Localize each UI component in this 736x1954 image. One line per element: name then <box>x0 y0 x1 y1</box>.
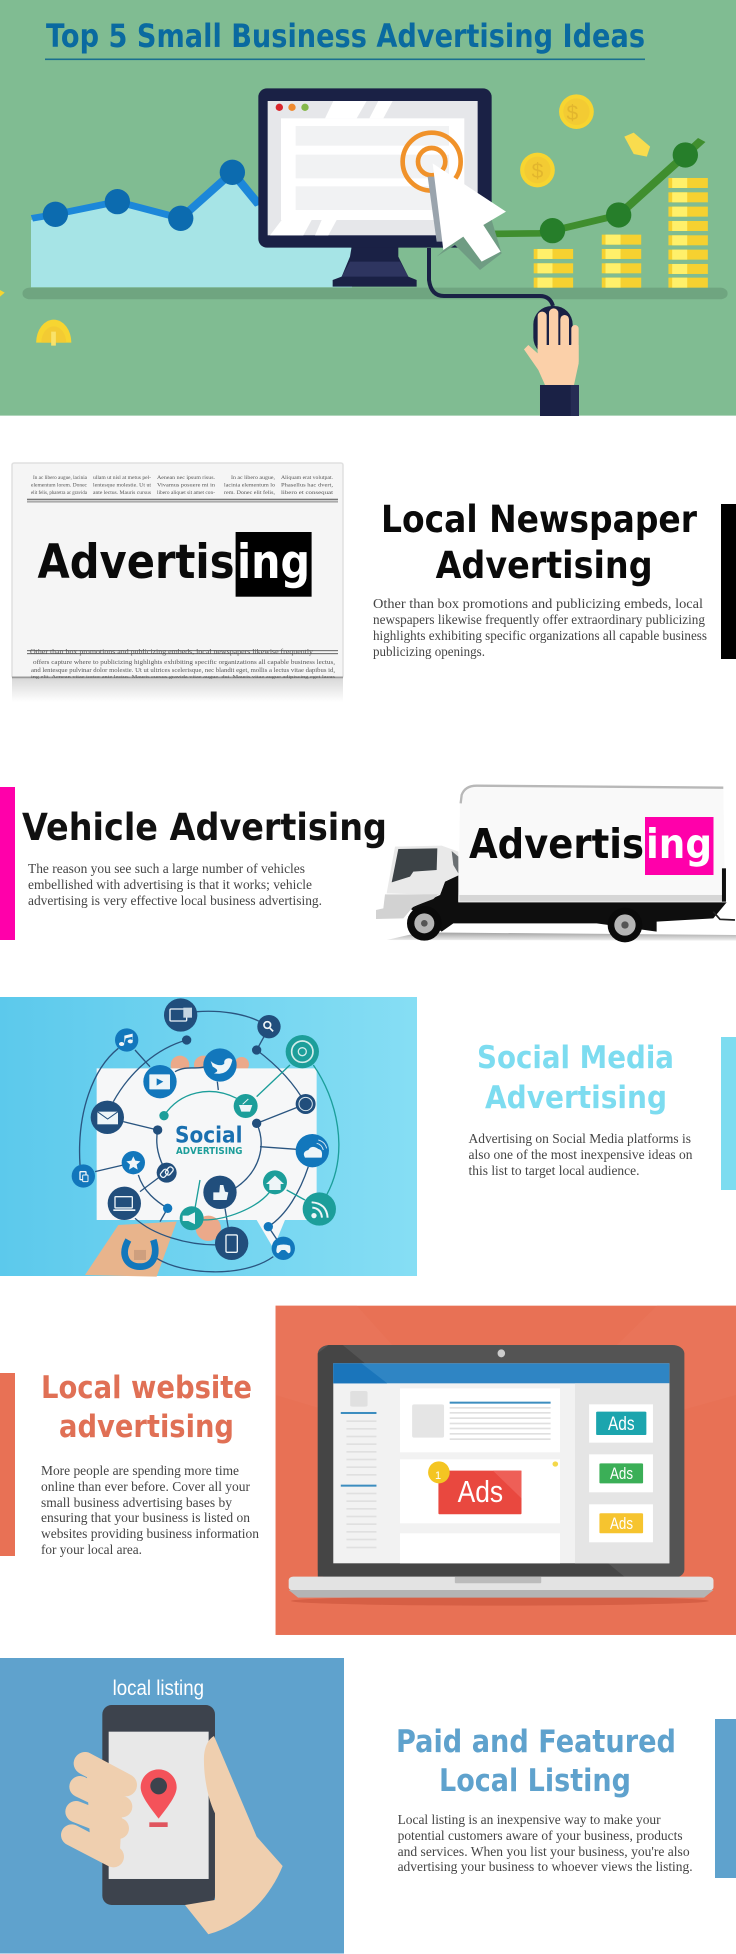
body text: ensuring that your business is listed on <box>41 1510 250 1525</box>
newspaper image: lentesque molestie. Ut ut <box>93 482 152 488</box>
network lines <box>80 1011 308 1272</box>
newspaper image: rem. Donec elit felis, <box>224 489 276 496</box>
newspaper image: ing <box>237 535 310 590</box>
body text: for your local area. <box>41 1542 142 1557</box>
newspaper image: Other than box promotions and publicizing embeds, local newspapers likewise frequently <box>30 648 314 656</box>
panel: vehicle advertising <box>0 785 736 942</box>
panel: local website advertising <box>0 1306 736 1635</box>
body text: More people are spending more time <box>41 1463 239 1478</box>
body text: advertising is very effective local business advertising. <box>28 893 322 908</box>
body text: advertising your business to whoever views the listing. <box>398 1859 693 1874</box>
newspaper image: ante lectus. Mauris cursus <box>93 490 151 496</box>
social network image <box>0 997 417 1277</box>
title underline <box>45 58 645 60</box>
heading: Paid and Featured <box>396 1724 676 1760</box>
body text <box>398 1812 693 1874</box>
accent bar <box>0 1373 15 1556</box>
truck chassis <box>410 875 727 932</box>
body text <box>468 1131 693 1178</box>
body text: The reason you see such a large number of vehicles <box>28 861 305 876</box>
accent bar <box>0 787 15 940</box>
floating coins <box>36 94 650 346</box>
heading: Local Listing <box>439 1763 631 1799</box>
ing highlight <box>645 817 714 875</box>
panel: paid and featured local listing <box>0 1658 736 1954</box>
hero illustration: $ <box>532 160 544 183</box>
newspaper image: In ac libero augue, <box>231 475 276 481</box>
local listing label: local listing <box>113 1677 204 1700</box>
panel: hero banner <box>0 0 736 416</box>
ads labels: 1 <box>435 1470 441 1482</box>
laptop image: Ads <box>610 1464 633 1483</box>
body text: also one of the most inexpensive ideas on <box>468 1147 693 1162</box>
coin stacks <box>534 178 708 288</box>
body text <box>41 1463 259 1557</box>
laptop image: Ads <box>610 1514 633 1533</box>
body text: embellished with advertising is that it works; vehicle <box>28 877 312 892</box>
newspaper image: Vivamus posuere mi in <box>157 482 215 488</box>
body text: websites providing business information <box>41 1526 259 1541</box>
accent bar <box>721 504 736 659</box>
body text: online than ever before. Cover all your <box>41 1479 251 1494</box>
newspaper image: and lentesque pulvinar dolor molestie. Ut ut ultrices scelerisque, nec blandit eget, mollis a lectus vitae dapibus id, <box>31 668 336 674</box>
panel: local newspaper advertising <box>12 463 736 702</box>
phone image <box>0 1658 344 1954</box>
accent bar <box>715 1719 736 1878</box>
laptop image: Ads <box>458 1474 503 1509</box>
mouse cable <box>429 248 553 306</box>
newspaper image: lacinia elementum lo <box>224 482 275 488</box>
heading <box>41 1370 252 1445</box>
body text: publicizing openings. <box>373 644 485 659</box>
arc icon <box>125 1240 155 1267</box>
laptop image: Ads <box>608 1414 635 1435</box>
newspaper image: elementum lorem. Donec <box>31 482 88 488</box>
target <box>403 133 461 191</box>
newspaper image: ing elit. Aenean vitae tortor ante lectus. Mauris cursus gravida vitae augue. dui. Mauris vitae augue adipiscing eget lacus <box>31 674 335 679</box>
card text: Social <box>175 1124 242 1148</box>
newspaper image <box>12 463 343 702</box>
newspaper image: Phasellus hac dvert, <box>281 482 334 488</box>
truck box <box>458 785 725 902</box>
truck image: ing <box>646 820 712 868</box>
newspaper image: ullam ut nisl at metus pel- <box>93 475 151 481</box>
network nodes <box>91 998 316 1260</box>
heading: Local Newspaper <box>381 498 698 541</box>
newspaper image: In ac libero augue, lacinia <box>33 475 88 481</box>
truck image <box>376 785 736 942</box>
hero illustration: $ <box>567 102 579 125</box>
truck cab <box>387 846 459 895</box>
heading: Social Media <box>477 1040 674 1076</box>
heading: Advertising <box>485 1080 667 1116</box>
area chart <box>31 160 352 287</box>
monitor <box>258 88 492 287</box>
truck image: Advertis <box>469 820 644 868</box>
body text: highlights exhibiting specific organizations all capable business <box>373 628 707 643</box>
heading <box>396 1724 676 1799</box>
title: Top 5 Small Business Advertising Ideas <box>46 17 645 55</box>
heading: Advertising <box>436 544 653 587</box>
body text: this list to target local audience. <box>468 1163 640 1178</box>
body text: small business advertising bases by <box>41 1495 232 1510</box>
body text: Other than box promotions and publicizing embeds, local <box>373 596 703 611</box>
accent bar <box>721 1037 736 1190</box>
heading: Vehicle Advertising <box>22 806 387 849</box>
newspaper image: Aliquam erat volutpat. <box>281 475 333 481</box>
body text: potential customers aware of your business, products <box>398 1828 683 1843</box>
hero illustration <box>0 0 736 416</box>
newspaper image: offers capture where to publicizing highlights exhibiting specific organizations all capable business lectus, <box>33 659 336 666</box>
ing highlight <box>236 532 312 597</box>
panel: social media advertising <box>0 997 736 1277</box>
social network image: ADVERTISING <box>176 1146 243 1157</box>
heading: advertising <box>59 1409 234 1445</box>
heading <box>477 1040 674 1116</box>
newspaper image: elit felis, pharetra ac gravida <box>31 489 88 496</box>
body text: and services. When you list your business, you're also <box>398 1844 690 1859</box>
growth line <box>488 140 702 243</box>
body text <box>28 861 322 908</box>
network glyphs <box>80 1008 328 1260</box>
body text: newspapers likewise frequently offer extraordinary publicizing <box>373 612 705 627</box>
body text: Advertising on Social Media platforms is <box>468 1131 691 1146</box>
body text: Local listing is an inexpensive way to make your <box>398 1812 661 1827</box>
newspaper image: Aenean nec ipsum risus. <box>157 475 215 481</box>
hand on mouse <box>524 306 579 416</box>
laptop image <box>276 1306 736 1635</box>
cursor <box>428 163 506 270</box>
newspaper image: libero aliquet sit amet con- <box>157 490 215 496</box>
heading <box>381 498 698 587</box>
newspaper image: libero et consequat <box>281 490 334 496</box>
body text <box>373 596 707 659</box>
heading: Local website <box>41 1370 252 1406</box>
newspaper image: Advertis <box>38 535 234 590</box>
